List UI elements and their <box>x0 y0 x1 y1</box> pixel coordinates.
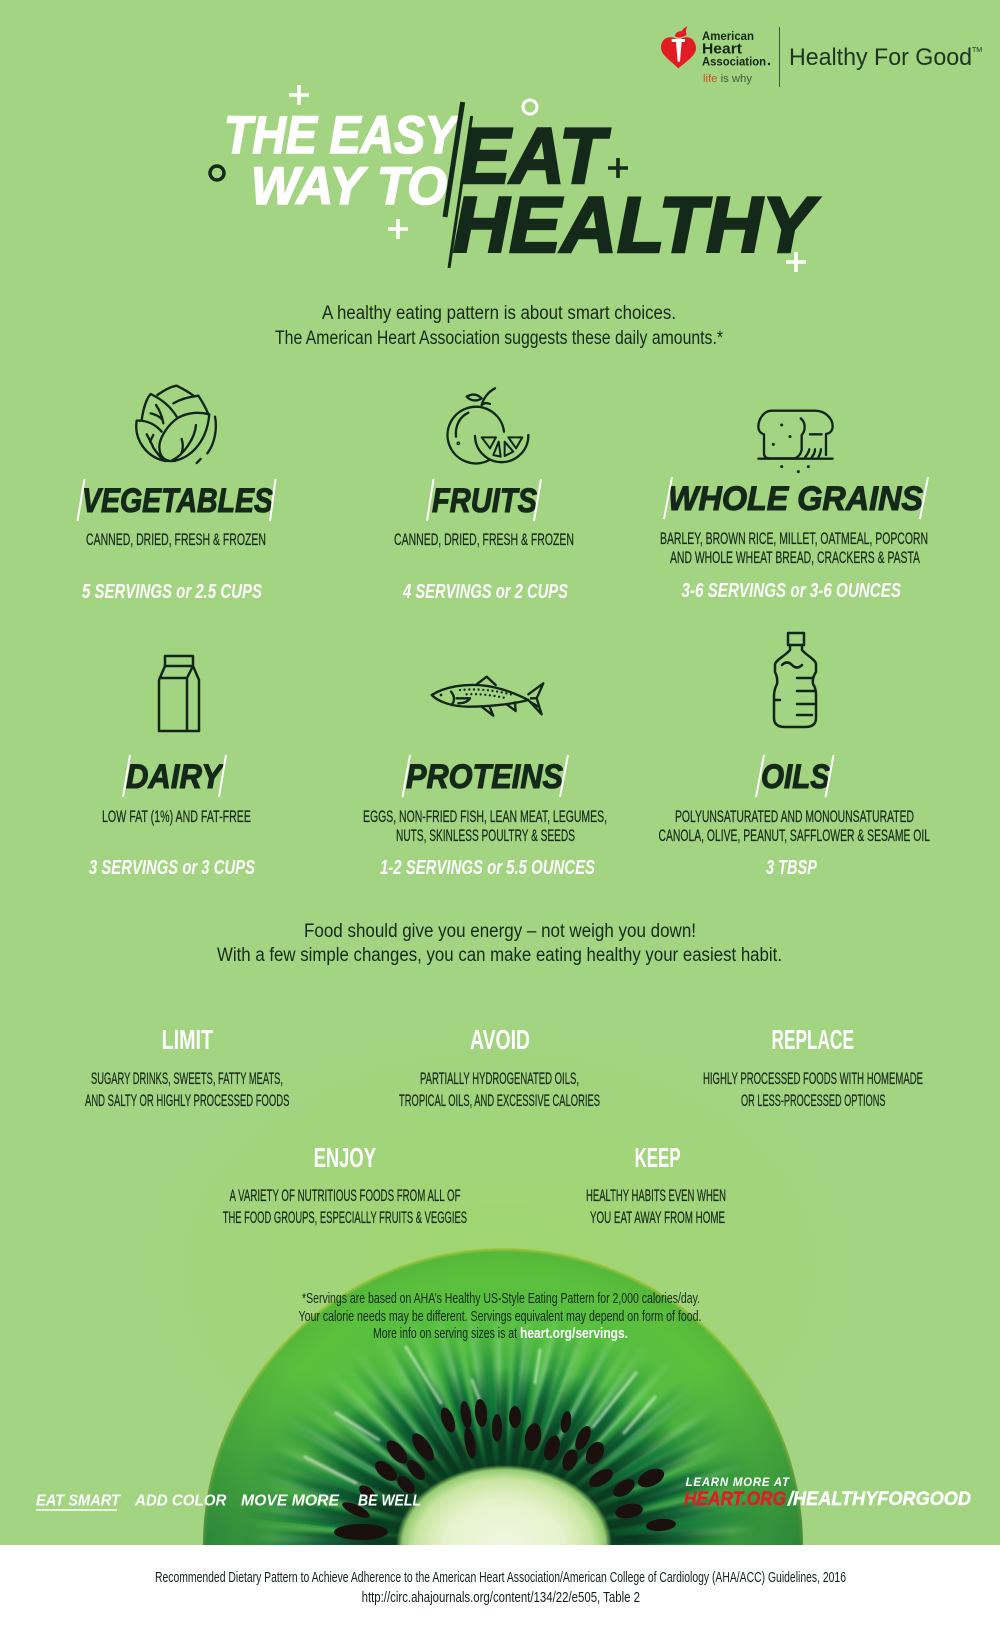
description: CANNED, DRIED, FRESH & FROZEN <box>86 530 266 549</box>
title white lines: THE EASY <box>224 106 460 165</box>
title dark lines: EAT <box>460 111 610 200</box>
icon: cabbage <box>136 386 216 463</box>
footer white band <box>0 1545 1000 1629</box>
footnote: *Servings are based on AHA’s Healthy US-Style Eating Pattern for 2,000 calories/day. <box>302 1291 700 1307</box>
tip: replace: REPLACE <box>772 1024 854 1055</box>
learn more call to action <box>684 1477 971 1510</box>
tip: keep: KEEP <box>635 1142 681 1173</box>
source citation: http://circ.ahajournals.org/content/134/22/e505, Table 2 <box>362 1590 640 1606</box>
footnote <box>298 1291 702 1342</box>
tip: limit: SUGARY DRINKS, SWEETS, FATTY MEATS, <box>91 1069 283 1088</box>
tip: limit <box>85 1024 290 1110</box>
servings: 3 TBSP <box>766 857 817 879</box>
icon: bread loaf <box>758 411 833 472</box>
logo wordmark: Association <box>702 56 766 68</box>
campaign navigation: BE WELL <box>358 1492 421 1510</box>
heading: dairy: DAIRY <box>126 758 225 796</box>
title slashes <box>445 102 472 268</box>
footnote: heart.org/servings. <box>520 1326 628 1342</box>
heading slashes <box>123 755 226 797</box>
tip: keep: YOU EAT AWAY FROM HOME <box>590 1208 725 1227</box>
campaign navigation: EAT SMART <box>36 1492 121 1510</box>
source citation <box>155 1570 846 1606</box>
servings: 3 SERVINGS or 3 CUPS <box>89 857 255 879</box>
title dark lines: HEALTHY <box>453 180 820 269</box>
intro text <box>275 303 723 349</box>
heading: vegetables: VEGETABLES <box>82 482 273 520</box>
icon: fish <box>432 677 543 716</box>
tip: keep: HEALTHY HABITS EVEN WHEN <box>586 1186 726 1205</box>
panel: oils <box>658 633 930 879</box>
heading slashes <box>402 755 568 797</box>
panel: proteins <box>363 677 607 879</box>
message text <box>217 921 782 966</box>
description: LOW FAT (1%) AND FAT-FREE <box>102 807 251 826</box>
icon: heart and torch <box>661 26 696 68</box>
tip: enjoy: THE FOOD GROUPS, ESPECIALLY FRUITS & VEGGIES <box>223 1208 467 1227</box>
tip: avoid: TROPICAL OILS, AND EXCESSIVE CALORIES <box>399 1091 600 1110</box>
icon: milk carton <box>159 656 199 731</box>
heading slashes <box>664 477 928 519</box>
heading slashes <box>78 479 276 521</box>
panel: dairy <box>89 656 255 879</box>
campaign navigation: ADD COLOR <box>134 1492 227 1510</box>
servings: 5 SERVINGS or 2.5 CUPS <box>82 581 262 603</box>
kiwi slice photo <box>203 1248 803 1545</box>
learn more call to action: /HEALTHYFORGOOD <box>787 1489 971 1510</box>
servings: 1-2 SERVINGS or 5.5 OUNCES <box>380 857 595 879</box>
logo wordmark: Heart <box>702 42 742 58</box>
intro text: The American Heart Association suggests these daily amounts.* <box>275 328 723 349</box>
title white lines <box>224 106 460 216</box>
logo wordmark: American <box>702 31 754 43</box>
campaign navigation <box>36 1492 421 1510</box>
icon: orange and slice <box>448 388 528 463</box>
logo divider <box>778 27 780 87</box>
heading: fruits: FRUITS <box>432 482 537 520</box>
Healthy For Good wordmark: Healthy For Good <box>789 44 972 71</box>
tip: enjoy: A VARIETY OF NUTRITIOUS FOODS FROM ALL OF <box>230 1186 460 1205</box>
tip: limit: AND SALTY OR HIGHLY PROCESSED FOODS <box>85 1091 290 1110</box>
decorative plus and circle marks <box>210 85 806 272</box>
trademark: TM <box>972 47 982 54</box>
tip: limit: LIMIT <box>162 1024 213 1055</box>
message text: Food should give you energy – not weigh you down! <box>304 921 696 942</box>
description <box>660 529 928 567</box>
panel: fruits <box>394 388 574 603</box>
tip: avoid <box>399 1024 600 1110</box>
description: NUTS, SKINLESS POULTRY & SEEDS <box>396 826 575 845</box>
intro text: A healthy eating pattern is about smart choices. <box>322 303 676 324</box>
description <box>658 807 930 845</box>
heading slashes <box>756 755 834 797</box>
learn more call to action: LEARN MORE AT <box>686 1477 790 1489</box>
servings: 3-6 SERVINGS or 3-6 OUNCES <box>682 580 901 602</box>
description: EGGS, NON-FRIED FISH, LEAN MEAT, LEGUMES, <box>363 807 607 826</box>
heading slashes <box>427 479 541 521</box>
tagline: life is why: life is why <box>703 73 753 85</box>
icon: oil bottle <box>774 633 816 727</box>
panel: vegetables <box>78 386 276 603</box>
heading: oils: OILS <box>761 758 830 796</box>
description: CANNED, DRIED, FRESH & FROZEN <box>394 530 574 549</box>
tip: enjoy: ENJOY <box>314 1142 376 1173</box>
heading: whole grains: WHOLE GRAINS <box>668 480 923 518</box>
tip: enjoy <box>223 1142 467 1227</box>
title: The Easy Way to Eat Healthy <box>210 85 820 272</box>
logo wordmark <box>702 31 770 68</box>
servings: 4 SERVINGS or 2 CUPS <box>402 581 568 603</box>
tip: avoid: PARTIALLY HYDROGENATED OILS, <box>420 1069 579 1088</box>
tip: avoid: AVOID <box>470 1024 530 1055</box>
tip: keep <box>586 1142 726 1227</box>
tip: replace <box>703 1024 923 1110</box>
panel: whole grains <box>660 411 928 602</box>
description <box>363 807 607 845</box>
title dark lines <box>453 111 820 269</box>
logo: American Heart Association Healthy For Good <box>661 26 982 87</box>
title white lines: WAY TO <box>251 157 447 216</box>
footnote: More info on serving sizes is at <box>373 1326 517 1342</box>
message text: With a few simple changes, you can make eating healthy your easiest habit. <box>217 945 782 966</box>
heading: proteins: PROTEINS <box>406 758 563 796</box>
footnote: Your calorie needs may be different. Servings equivalent may depend on form of food. <box>298 1309 702 1325</box>
learn more call to action: HEART.ORG <box>684 1489 786 1510</box>
campaign navigation: MOVE MORE <box>241 1492 340 1510</box>
